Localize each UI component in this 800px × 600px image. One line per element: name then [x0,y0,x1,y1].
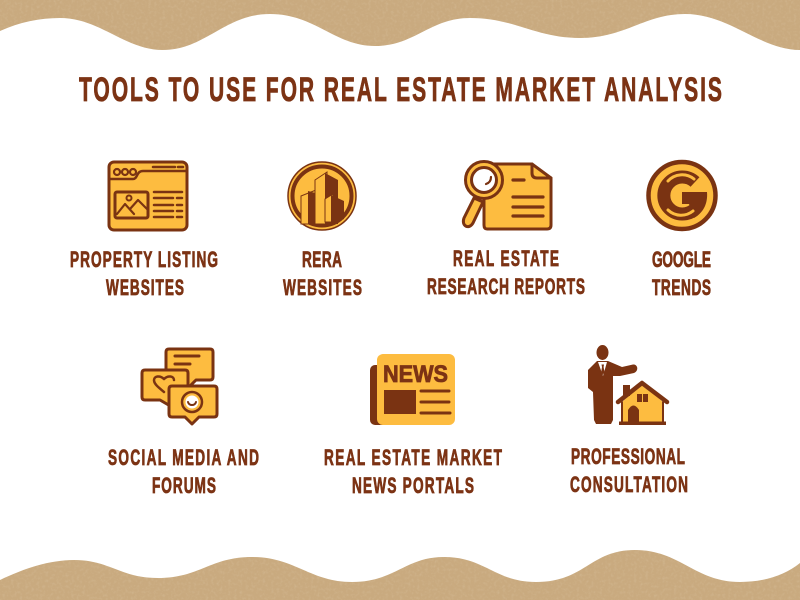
label: PROPERTY LISTING [70,247,218,272]
label [570,444,688,497]
label: REAL ESTATE [453,246,559,271]
label: FORUMS [152,473,216,498]
label [652,247,711,300]
label [427,246,585,299]
icon: newspaper [370,354,455,425]
label: NEWS PORTALS [352,473,474,498]
label: RESEARCH REPORTS [427,274,585,299]
icon: browser window [109,162,187,230]
icon: businessman and house [588,345,667,425]
label [108,445,259,498]
label: WEBSITES [106,275,184,300]
icon: newspaper: NEWS [383,361,448,388]
label [70,247,218,300]
label: CONSULTATION [570,472,688,497]
icon: buildings in circle [288,162,356,230]
label: PROFESSIONAL [571,444,685,469]
icon: chat bubbles [142,349,217,424]
label: SOCIAL MEDIA AND [108,445,259,470]
label: WEBSITES [283,275,362,300]
top wave banner [0,0,800,50]
icon: google g [648,162,716,229]
label [283,247,362,300]
item: rera websites [283,162,362,300]
item: real estate research reports [427,162,585,299]
item: property listing websites [70,162,218,300]
label: RERA [302,247,342,272]
label: TRENDS [652,275,711,300]
title: TOOLS TO USE FOR REAL ESTATE MARKET ANALYSIS [79,70,722,108]
item: social media and forums [108,349,259,498]
label: REAL ESTATE MARKET [324,445,502,470]
item: professional consultation [570,345,688,497]
item: google trends [648,162,716,300]
item: real estate market news portals [324,354,502,498]
bottom wave banner [0,550,800,600]
label: GOOGLE [652,247,711,272]
icon: magnifier over document [463,162,551,229]
label [324,445,502,498]
